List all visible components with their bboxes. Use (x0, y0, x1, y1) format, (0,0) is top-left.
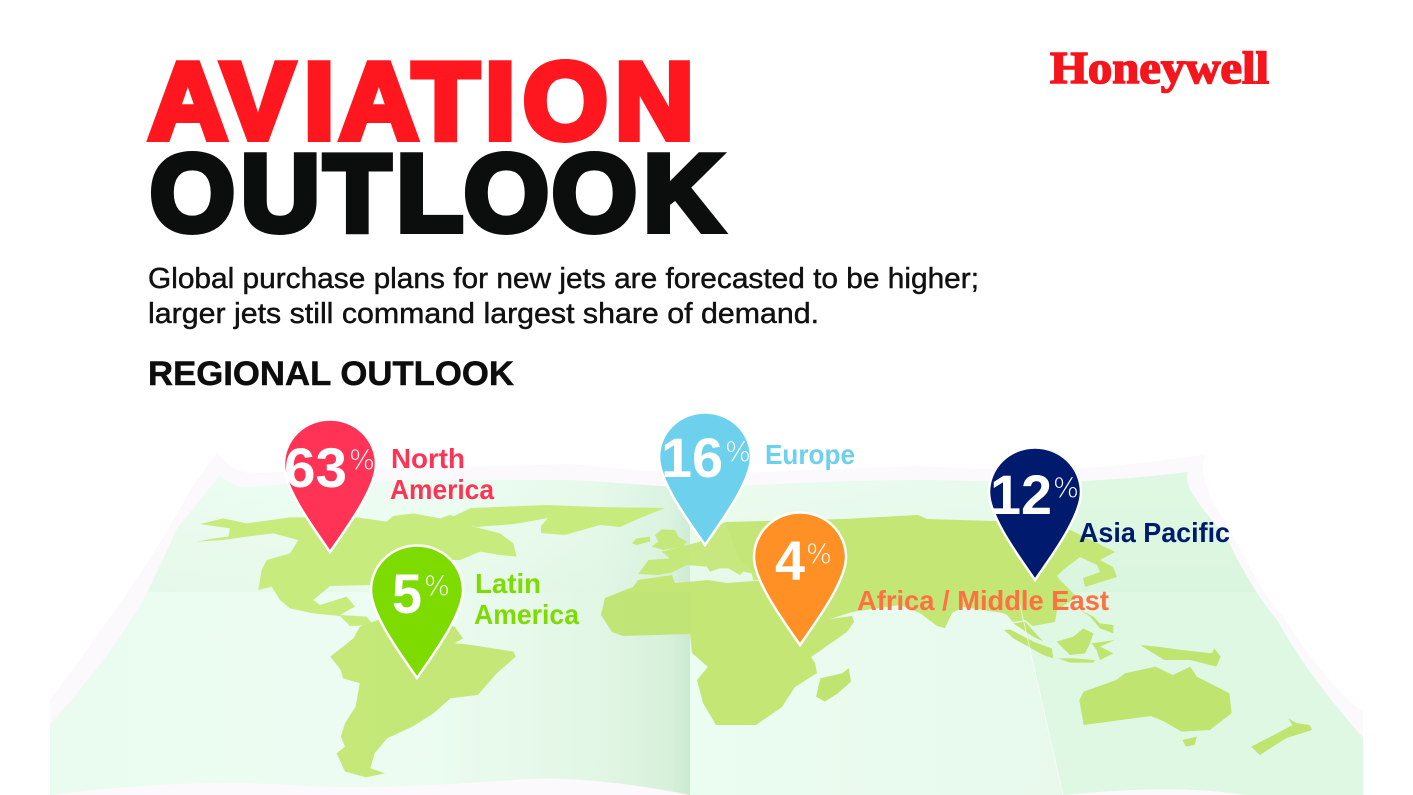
land: Australia, New Guinea, New Zealand, Madagascar (816, 645, 1312, 755)
label: Latin America (474, 568, 579, 630)
map sheet panels (50, 440, 1370, 795)
subtitle text: larger jets still command largest share of demand. (148, 298, 819, 330)
land: Africa (601, 575, 854, 725)
pin: Latin America 5% (371, 546, 463, 678)
label: Asia Pacific: Asia Pacific (1079, 517, 1230, 548)
pin: Africa / Middle East 4%: 4 (775, 529, 805, 592)
map: folded world map (50, 440, 1370, 795)
land: Southeast Asia, Oceania islands (1004, 610, 1115, 663)
pin: Latin America 5%: 5 (392, 562, 422, 625)
label: North America (390, 443, 494, 505)
land: Europe (632, 522, 773, 580)
label: Latin America: America (474, 599, 579, 630)
title: AVIATION OUTLOOK (148, 40, 722, 254)
pin: Europe 16%: 16 (661, 426, 723, 489)
land: Asia (725, 515, 1117, 628)
land: South America (330, 617, 516, 777)
pin: Africa / Middle East 4%: % (806, 539, 832, 570)
pin: North America 63%: % (349, 445, 375, 476)
pin: Africa / Middle East 4% (754, 512, 846, 645)
map fold shading (323, 500, 1063, 795)
heading: regional outlook: REGIONAL OUTLOOK (148, 355, 514, 393)
pin: North America 63%: 63 (284, 436, 347, 499)
pin: Latin America 5%: % (424, 571, 450, 602)
pin: Asia Pacific 12%: % (1053, 473, 1079, 504)
land: Greenland and Arctic islands (450, 505, 665, 535)
pin: North America 63% (284, 420, 376, 552)
map sheet border (50, 453, 1363, 795)
title line: AVIATION: AVIATION (148, 40, 694, 162)
land: British Isles (632, 529, 687, 550)
subtitle text (148, 263, 979, 330)
pin: Asia Pacific 12%: 12 (990, 463, 1052, 526)
label: Europe: Europe (765, 439, 855, 470)
pin: Europe 16%: % (725, 437, 751, 468)
pin: Europe 16% (659, 412, 751, 545)
title line: OUTLOOK: OUTLOOK (150, 132, 722, 254)
label: Africa / Middle East: Africa / Middle East (857, 585, 1109, 616)
subtitle text: Global purchase plans for new jets are forecasted to be higher; (148, 263, 979, 295)
label: Latin America: Latin (475, 568, 541, 599)
land: North and Central America (197, 513, 517, 626)
logo: Honeywell: Honeywell (1050, 42, 1269, 93)
pin: Asia Pacific 12% (989, 448, 1081, 580)
label: North America: North (391, 443, 465, 474)
label: North America: America (390, 474, 494, 505)
